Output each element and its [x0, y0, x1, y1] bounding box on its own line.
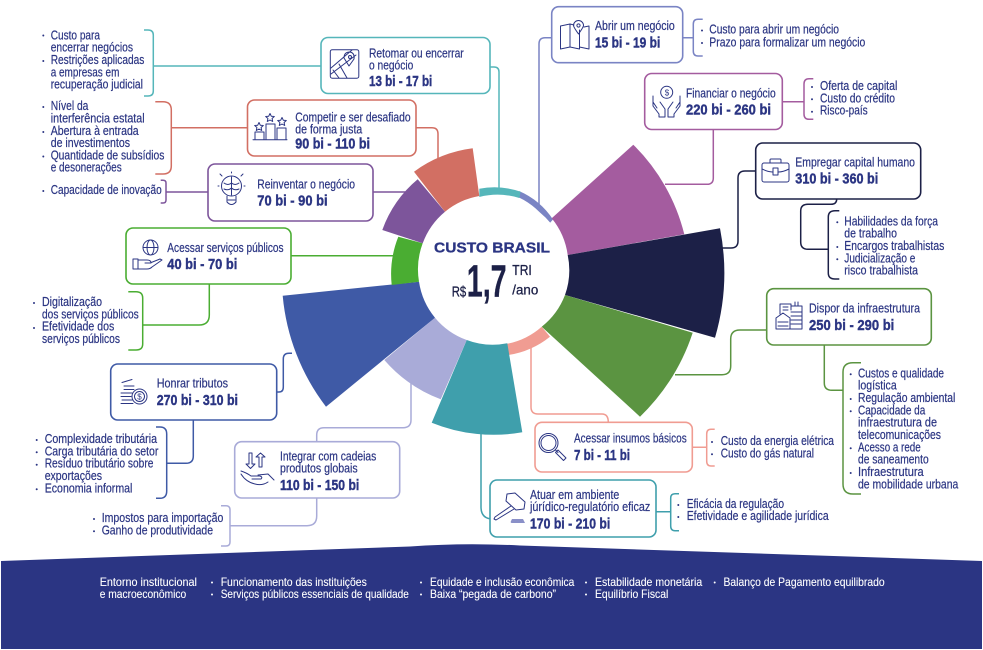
- panel: financiar: [645, 74, 782, 130]
- panel: empregar: Empregar capital humano: [795, 156, 915, 170]
- panel: acessar serviços públicos: Acessar serviços públicos: [167, 241, 284, 255]
- list: competir: Quantidade de subsídios: [51, 148, 164, 162]
- connector: abrir: [539, 38, 693, 206]
- list: dispor: de saneamento: [858, 453, 929, 467]
- list: retomar ou encerrar: [42, 28, 153, 96]
- list: serviços públicos: Digitalização: [42, 295, 102, 309]
- panel: bottom band: Equidade e inclusão econômica: [430, 575, 575, 589]
- center: total: [419, 196, 567, 344]
- list: integrar: Impostos para importação: [102, 511, 223, 525]
- list: dispor: infraestrutura de: [858, 416, 937, 430]
- center period: /ano: [512, 281, 539, 297]
- panel: competir: [248, 100, 416, 156]
- list: abrir: [693, 19, 865, 56]
- connector: financiar: [665, 102, 804, 184]
- list: financiar: Custo do crédito: [820, 91, 895, 105]
- list: atuar: Efetividade e agilidade jurídica: [687, 509, 829, 523]
- icon: globe on hand: [133, 240, 162, 269]
- panel: retomar ou encerrar: Retomar ou encerrar: [369, 46, 464, 60]
- panel: bottom band: Baixa “pegada de carbono”: [430, 587, 556, 601]
- sector: competir: [414, 148, 479, 212]
- panel: bottom band: Estabilidade monetária: [595, 575, 702, 589]
- connector: dispor: [675, 330, 843, 390]
- panel: honrar tributos: [111, 364, 277, 420]
- panel: insumos: 7 bi - 11 bi: [574, 448, 630, 464]
- panel: financiar: 220 bi - 260 bi: [686, 103, 771, 119]
- sector: serviços públicos: [391, 237, 423, 285]
- panel: empregar: 310 bi - 360 bi: [795, 172, 878, 188]
- icon: hands with coin: [653, 86, 680, 117]
- connector: serviços públicos: [143, 256, 395, 325]
- panel: integrar: Integrar com cadeias: [280, 449, 376, 463]
- panel: reinventar: Reinventar o negócio: [257, 178, 355, 192]
- panel: retomar ou encerrar: o negócio: [369, 58, 413, 72]
- list: integrar: [93, 506, 230, 546]
- icon: gavel base: [511, 519, 525, 523]
- panel: integrar: 110 bi - 150 bi: [280, 478, 359, 494]
- list: competir: interferência estatal: [51, 111, 145, 125]
- panel: dispor: Dispor da infraestrutura: [809, 302, 920, 316]
- panel: abrir um negócio: 15 bi - 19 bi: [595, 35, 660, 51]
- connector: insumos: [531, 345, 707, 447]
- center currency: R$: [452, 284, 467, 301]
- list: integrar: Ganho de produtividade: [102, 523, 213, 537]
- list: honrar tributos: [36, 427, 167, 498]
- panel: bottom band: Equilíbrio Fiscal: [595, 587, 668, 601]
- icon: arrows over hand: [241, 453, 274, 485]
- panel: dispor: 250 bi - 290 bi: [809, 318, 894, 334]
- connector: retomar: [153, 66, 499, 190]
- panel: acessar serviços públicos: 40 bi - 70 bi: [167, 257, 237, 273]
- center heading: CUSTO BRASIL: [434, 240, 550, 257]
- icon text: dollar: $: [137, 392, 142, 402]
- list: atuar: [671, 494, 829, 531]
- sector: honrar: [283, 282, 435, 407]
- icon: coins: [121, 380, 147, 404]
- list: dispor: de mobilidade urbana: [858, 477, 958, 491]
- panel: competir: Competir e ser desafiado: [295, 111, 411, 125]
- list: serviços públicos: dos serviços públicos: [42, 307, 139, 321]
- panel: bottom band: Funcionamento das instituições: [221, 575, 367, 589]
- sector: abrir: [519, 191, 553, 224]
- panel: dispor: [767, 289, 931, 345]
- list: empregar: [828, 211, 944, 279]
- sector: insumos: [506, 327, 550, 355]
- panel: abrir um negócio: Abrir um negócio: [595, 19, 675, 33]
- icon: magnifier: [539, 434, 566, 460]
- list: insumos: [707, 429, 834, 466]
- list: abrir: Custo para abrir um negócio: [709, 23, 839, 37]
- connector: competir: [171, 128, 438, 160]
- chart: radial sectors: [283, 145, 724, 435]
- panel: competir: de forma justa: [295, 123, 362, 137]
- panel: atuar: 170 bi - 210 bi: [530, 517, 610, 533]
- list: financiar: Oferta de capital: [820, 79, 897, 93]
- icon text: coin dollar: $: [665, 88, 670, 97]
- list: empregar: de trabalho: [844, 227, 897, 241]
- list: financiar: [804, 79, 897, 119]
- center value: 1,7: [467, 256, 507, 307]
- panel: insumos: Acessar insumos básicos: [574, 432, 687, 446]
- band heading: Entorno institucional: [100, 575, 197, 589]
- list: insumos: Custo da energia elétrica: [721, 434, 834, 448]
- list: empregar: Judicialização e: [844, 251, 915, 265]
- panel: bottom band: Serviços públicos essenciais de qualidade: [221, 587, 409, 601]
- icon: briefcase: [762, 159, 789, 182]
- icon: map with pin: [560, 20, 589, 49]
- panel: bottom band: [1, 544, 982, 649]
- list: honrar tributos: Resíduo tributário sobre: [45, 457, 153, 471]
- panel: abrir um negócio: [552, 7, 683, 63]
- sector: dispor: [542, 295, 693, 417]
- list: dispor: Custos e qualidade: [858, 366, 944, 380]
- panel: atuar: [490, 480, 656, 537]
- list: dispor: Capacidade da: [858, 403, 925, 417]
- sector: reinventar: [382, 179, 445, 243]
- panel: retomar ou encerrar: 13 bi - 17 bi: [369, 74, 432, 90]
- connector: honrar tributos: [167, 353, 292, 463]
- list: retomar ou encerrar: Restrições aplicadas: [51, 53, 144, 67]
- connector: reinventar: [166, 191, 410, 193]
- list: dispor: telecomunicações: [858, 428, 941, 442]
- list: retomar ou encerrar: encerrar negócios: [51, 41, 133, 55]
- list: atuar: Eficácia da regulação: [687, 497, 784, 511]
- icon: gavel: [494, 493, 525, 520]
- panel: atuar: Atuar em ambiente: [530, 488, 619, 502]
- list: serviços públicos: [33, 292, 143, 350]
- sector: empregar: [565, 228, 724, 338]
- list: honrar tributos: Carga tributária do setor: [45, 444, 158, 458]
- panel: bottom band: e macroeconômico: [100, 587, 186, 601]
- icon: road map: [330, 50, 359, 78]
- center unit: TRI: [512, 262, 532, 279]
- sector: integrar: [384, 318, 467, 399]
- list: empregar: Encargos trabalhistas: [844, 239, 944, 253]
- list: competir: Nível da: [51, 99, 88, 113]
- list: retomar ou encerrar: a empresas em: [51, 66, 119, 80]
- list: empregar: Habilidades da força: [844, 214, 938, 228]
- list: dispor: Infraestrutura: [858, 465, 924, 479]
- icon: podium with stars: [253, 114, 287, 140]
- list: dispor: [843, 363, 958, 494]
- panel: reinventar: [208, 164, 373, 221]
- panel: financiar: Financiar o negócio: [686, 86, 776, 100]
- list: inovação: Capacidade de inovação: [51, 183, 162, 197]
- list: dispor: Acesso a rede: [858, 440, 921, 454]
- panel: retomar ou encerrar: [321, 38, 490, 94]
- connector: empregar: [720, 171, 837, 249]
- list: honrar tributos: Economia informal: [45, 481, 132, 495]
- icon: brain bulb: [218, 172, 245, 204]
- list: competir: Abertura à entrada: [51, 124, 139, 138]
- list: financiar: Risco-país: [820, 104, 868, 118]
- list: honrar tributos: exportações: [45, 469, 102, 483]
- icon: buildings: [776, 302, 802, 329]
- list: honrar tributos: Complexidade tributária: [45, 432, 157, 446]
- panel: atuar: júrídico-regulatório eficaz: [529, 500, 650, 514]
- list: abrir: Prazo para formalizar um negócio: [709, 35, 865, 49]
- list: inovação: [42, 180, 166, 203]
- panel: bottom band: Balanço de Pagamento equilibrado: [724, 575, 885, 589]
- panel: empregar: [756, 143, 921, 199]
- connector: integrar: [230, 380, 411, 526]
- list: retomar ou encerrar: Custo para: [51, 28, 100, 42]
- list: serviços públicos: serviços públicos: [42, 332, 120, 346]
- panel: insumos: [535, 422, 692, 472]
- panel: acessar serviços públicos: [126, 228, 291, 284]
- panel: reinventar: 70 bi - 90 bi: [257, 193, 328, 209]
- panel: honrar tributos: 270 bi - 310 bi: [157, 393, 238, 409]
- sector: financiar: [552, 145, 684, 255]
- list: retomar ou encerrar: recuperação judicial: [51, 78, 143, 92]
- panel: honrar tributos: Honrar tributos: [157, 377, 228, 391]
- list: empregar: risco trabalhista: [844, 264, 918, 278]
- list: competir: de investimentos: [51, 136, 130, 150]
- panel: competir: 90 bi - 110 bi: [295, 136, 370, 152]
- list: competir: [42, 99, 171, 175]
- list: insumos: Custo do gás natural: [721, 446, 814, 460]
- sector: retomar: [479, 187, 521, 198]
- list: serviços públicos: Efetividade dos: [42, 320, 114, 334]
- connector: atuar: [481, 425, 671, 519]
- panel: integrar: [235, 442, 400, 498]
- list: competir: e desonerações: [51, 161, 122, 175]
- list: dispor: Regulação ambiental: [858, 391, 955, 405]
- panel: integrar: produtos globais: [280, 462, 358, 476]
- sector: atuar: [432, 340, 522, 435]
- list: dispor: logística: [858, 379, 897, 393]
